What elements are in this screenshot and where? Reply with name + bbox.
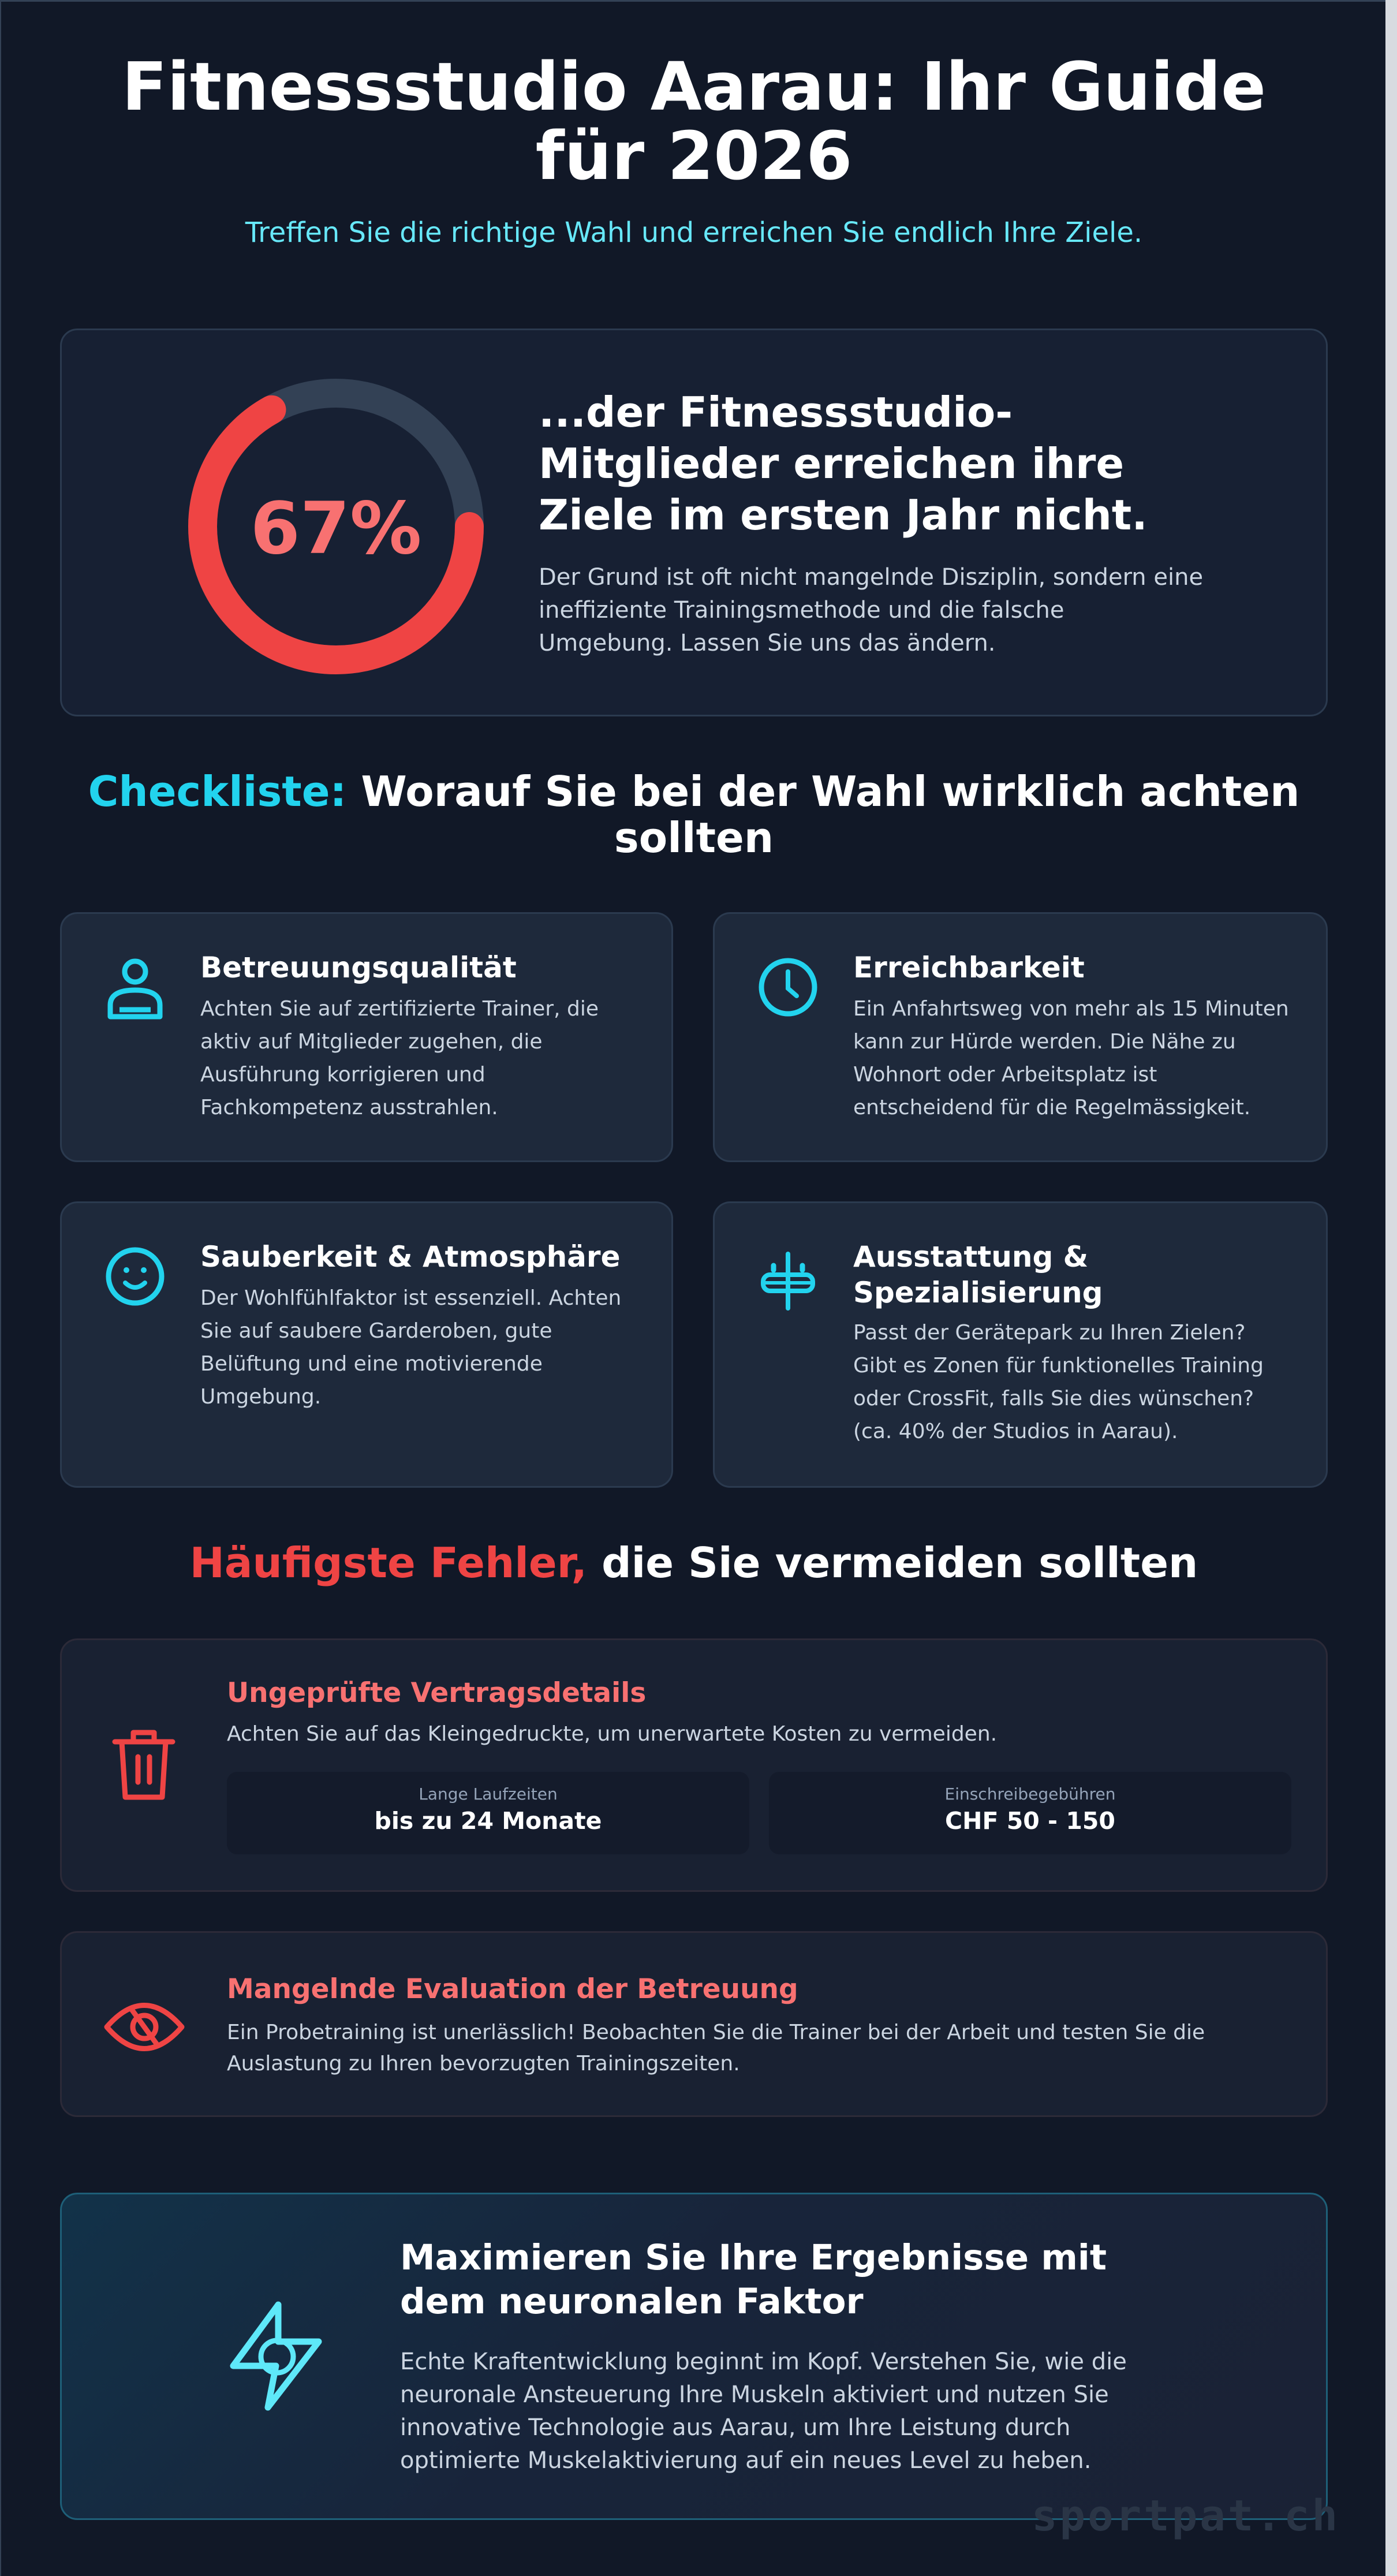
mistakes heading: Häufigste Fehler, die Sie vermeiden sollten: [190, 1539, 1198, 1587]
card: Erreichbarkeit: entscheidend für die Regelmässigkeit.: [853, 1096, 1250, 1119]
checklist heading: sollten: [614, 813, 774, 862]
sub box: Laufzeiten: [227, 1772, 749, 1854]
panel: mistake evaluation: Ein Probetraining ist unerlässlich! Beobachten Sie die Trainer bei der Arbeit und testen Sie die: [227, 2021, 1205, 2044]
title: für 2026: [536, 118, 852, 195]
card: Betreuungsqualität: aktiv auf Mitglieder zugehen, die: [200, 1030, 543, 1054]
card: Ausstattung: [713, 1201, 1328, 1488]
card: Sauberkeit: Sie auf saubere Garderoben, gute: [200, 1319, 552, 1343]
panel: neural factor: Maximieren Sie Ihre Ergebnisse mit: [400, 2237, 1107, 2278]
donut chart 67%: 67%: [251, 487, 421, 570]
sub box: Gebühren: [769, 1772, 1291, 1854]
stat headline: Mitglieder erreichen ihre: [539, 439, 1124, 488]
panel: neural factor: neuronale Ansteuerung Ihre Muskeln aktiviert und nutzen Sie: [400, 2381, 1109, 2408]
card: Betreuungsqualität: [60, 912, 673, 1162]
watermark: sportpat.ch: [1032, 2491, 1340, 2541]
card: Betreuungsqualität: Fachkompetenz ausstrahlen.: [200, 1096, 498, 1119]
icon: eye crossed: [104, 2003, 185, 2051]
card: Erreichbarkeit: [713, 912, 1328, 1162]
panel: mistake contract: Ungeprüfte Vertragsdetails: [227, 1677, 646, 1709]
checklist heading: [88, 767, 1299, 862]
sub box: Gebühren: Einschreibegebühren: [944, 1784, 1115, 1804]
card: Ausstattung: Gibt es Zonen für funktionelles Training: [853, 1354, 1264, 1377]
card: Betreuungsqualität: Betreuungsqualität: [200, 951, 517, 984]
panel: mistake contract: [60, 1638, 1328, 1892]
subtitle: Treffen Sie die richtige Wahl und erreichen Sie endlich Ihre Ziele.: [245, 216, 1142, 249]
title: [122, 48, 1266, 195]
card: Ausstattung: Ausstattung &: [853, 1240, 1088, 1274]
panel: mistake evaluation: [60, 1931, 1328, 2117]
panel: statistic: [60, 328, 1328, 716]
card: Ausstattung: (ca. 40% der Studios in Aarau).: [853, 1420, 1178, 1443]
title: Fitnessstudio Aarau: Ihr Guide: [122, 48, 1266, 126]
icon: dumbbell: [761, 1252, 815, 1311]
card: Sauberkeit: Umgebung.: [200, 1385, 321, 1409]
panel: mistake contract: Achten Sie auf das Kleingedruckte, um unerwartete Kosten zu vermeiden.: [227, 1722, 997, 1746]
stat headline: ...der Fitnessstudio-: [539, 388, 1013, 436]
donut chart 67%: [188, 379, 484, 674]
panel: mistake evaluation: Auslastung zu Ihren bevorzugten Trainingszeiten.: [227, 2052, 740, 2075]
card: Betreuungsqualität: Ausführung korrigieren und: [200, 1063, 485, 1087]
stat description: Der Grund ist oft nicht mangelnde Disziplin, sondern eine: [539, 564, 1203, 591]
stat description: ineffiziente Trainingsmethode und die falsche: [539, 597, 1064, 624]
checklist heading: Checkliste: Worauf Sie bei der Wahl wirklich achten: [88, 767, 1299, 816]
icon: trash: [112, 1730, 175, 1800]
panel: neural factor: Echte Kraftentwicklung beginnt im Kopf. Verstehen Sie, wie die: [400, 2349, 1127, 2375]
card: Erreichbarkeit: Wohnort oder Arbeitsplatz ist: [853, 1063, 1157, 1087]
card: Ausstattung: Passt der Gerätepark zu Ihren Zielen?: [853, 1321, 1246, 1345]
card: Ausstattung: oder CrossFit, falls Sie dies wünschen?: [853, 1387, 1254, 1410]
card: Ausstattung: Spezialisierung: [853, 1276, 1103, 1309]
sub box: Laufzeiten: bis zu 24 Monate: [375, 1807, 602, 1835]
panel: mistake evaluation: Mangelnde Evaluation der Betreuung: [227, 1973, 798, 2005]
card: Erreichbarkeit: kann zur Hürde werden. Die Nähe zu: [853, 1030, 1236, 1054]
card: Erreichbarkeit: Ein Anfahrtsweg von mehr als 15 Minuten: [853, 997, 1289, 1021]
icon: person: [107, 958, 163, 1020]
icon: clock: [759, 958, 817, 1016]
card: Sauberkeit: Sauberkeit & Atmosphäre: [200, 1240, 620, 1274]
card: Sauberkeit: Der Wohlfühlfaktor ist essenziell. Achten: [200, 1286, 621, 1310]
stat headline: [539, 388, 1148, 539]
panel: neural factor: [60, 2193, 1328, 2520]
icon: lightning: [230, 2301, 322, 2411]
panel: neural factor: innovative Technologie aus Aarau, um Ihre Leistung durch: [400, 2414, 1070, 2441]
card: Sauberkeit: Belüftung und eine motivierende: [200, 1352, 543, 1376]
card: Betreuungsqualität: Achten Sie auf zertifizierte Trainer, die: [200, 997, 599, 1021]
card: Sauberkeit: [60, 1201, 673, 1488]
stat headline: Ziele im ersten Jahr nicht.: [539, 491, 1148, 539]
sub box: Laufzeiten: Lange Laufzeiten: [419, 1784, 558, 1804]
card: Erreichbarkeit: Erreichbarkeit: [853, 951, 1085, 984]
stat description: Umgebung. Lassen Sie uns das ändern.: [539, 630, 996, 656]
panel: neural factor: dem neuronalen Faktor: [400, 2281, 864, 2322]
icon: smiley: [106, 1247, 164, 1306]
panel: neural factor: optimierte Muskelaktivierung auf ein neues Level zu heben.: [400, 2447, 1091, 2474]
sub box: Gebühren: CHF 50 - 150: [945, 1807, 1115, 1835]
stat description: [539, 564, 1203, 656]
